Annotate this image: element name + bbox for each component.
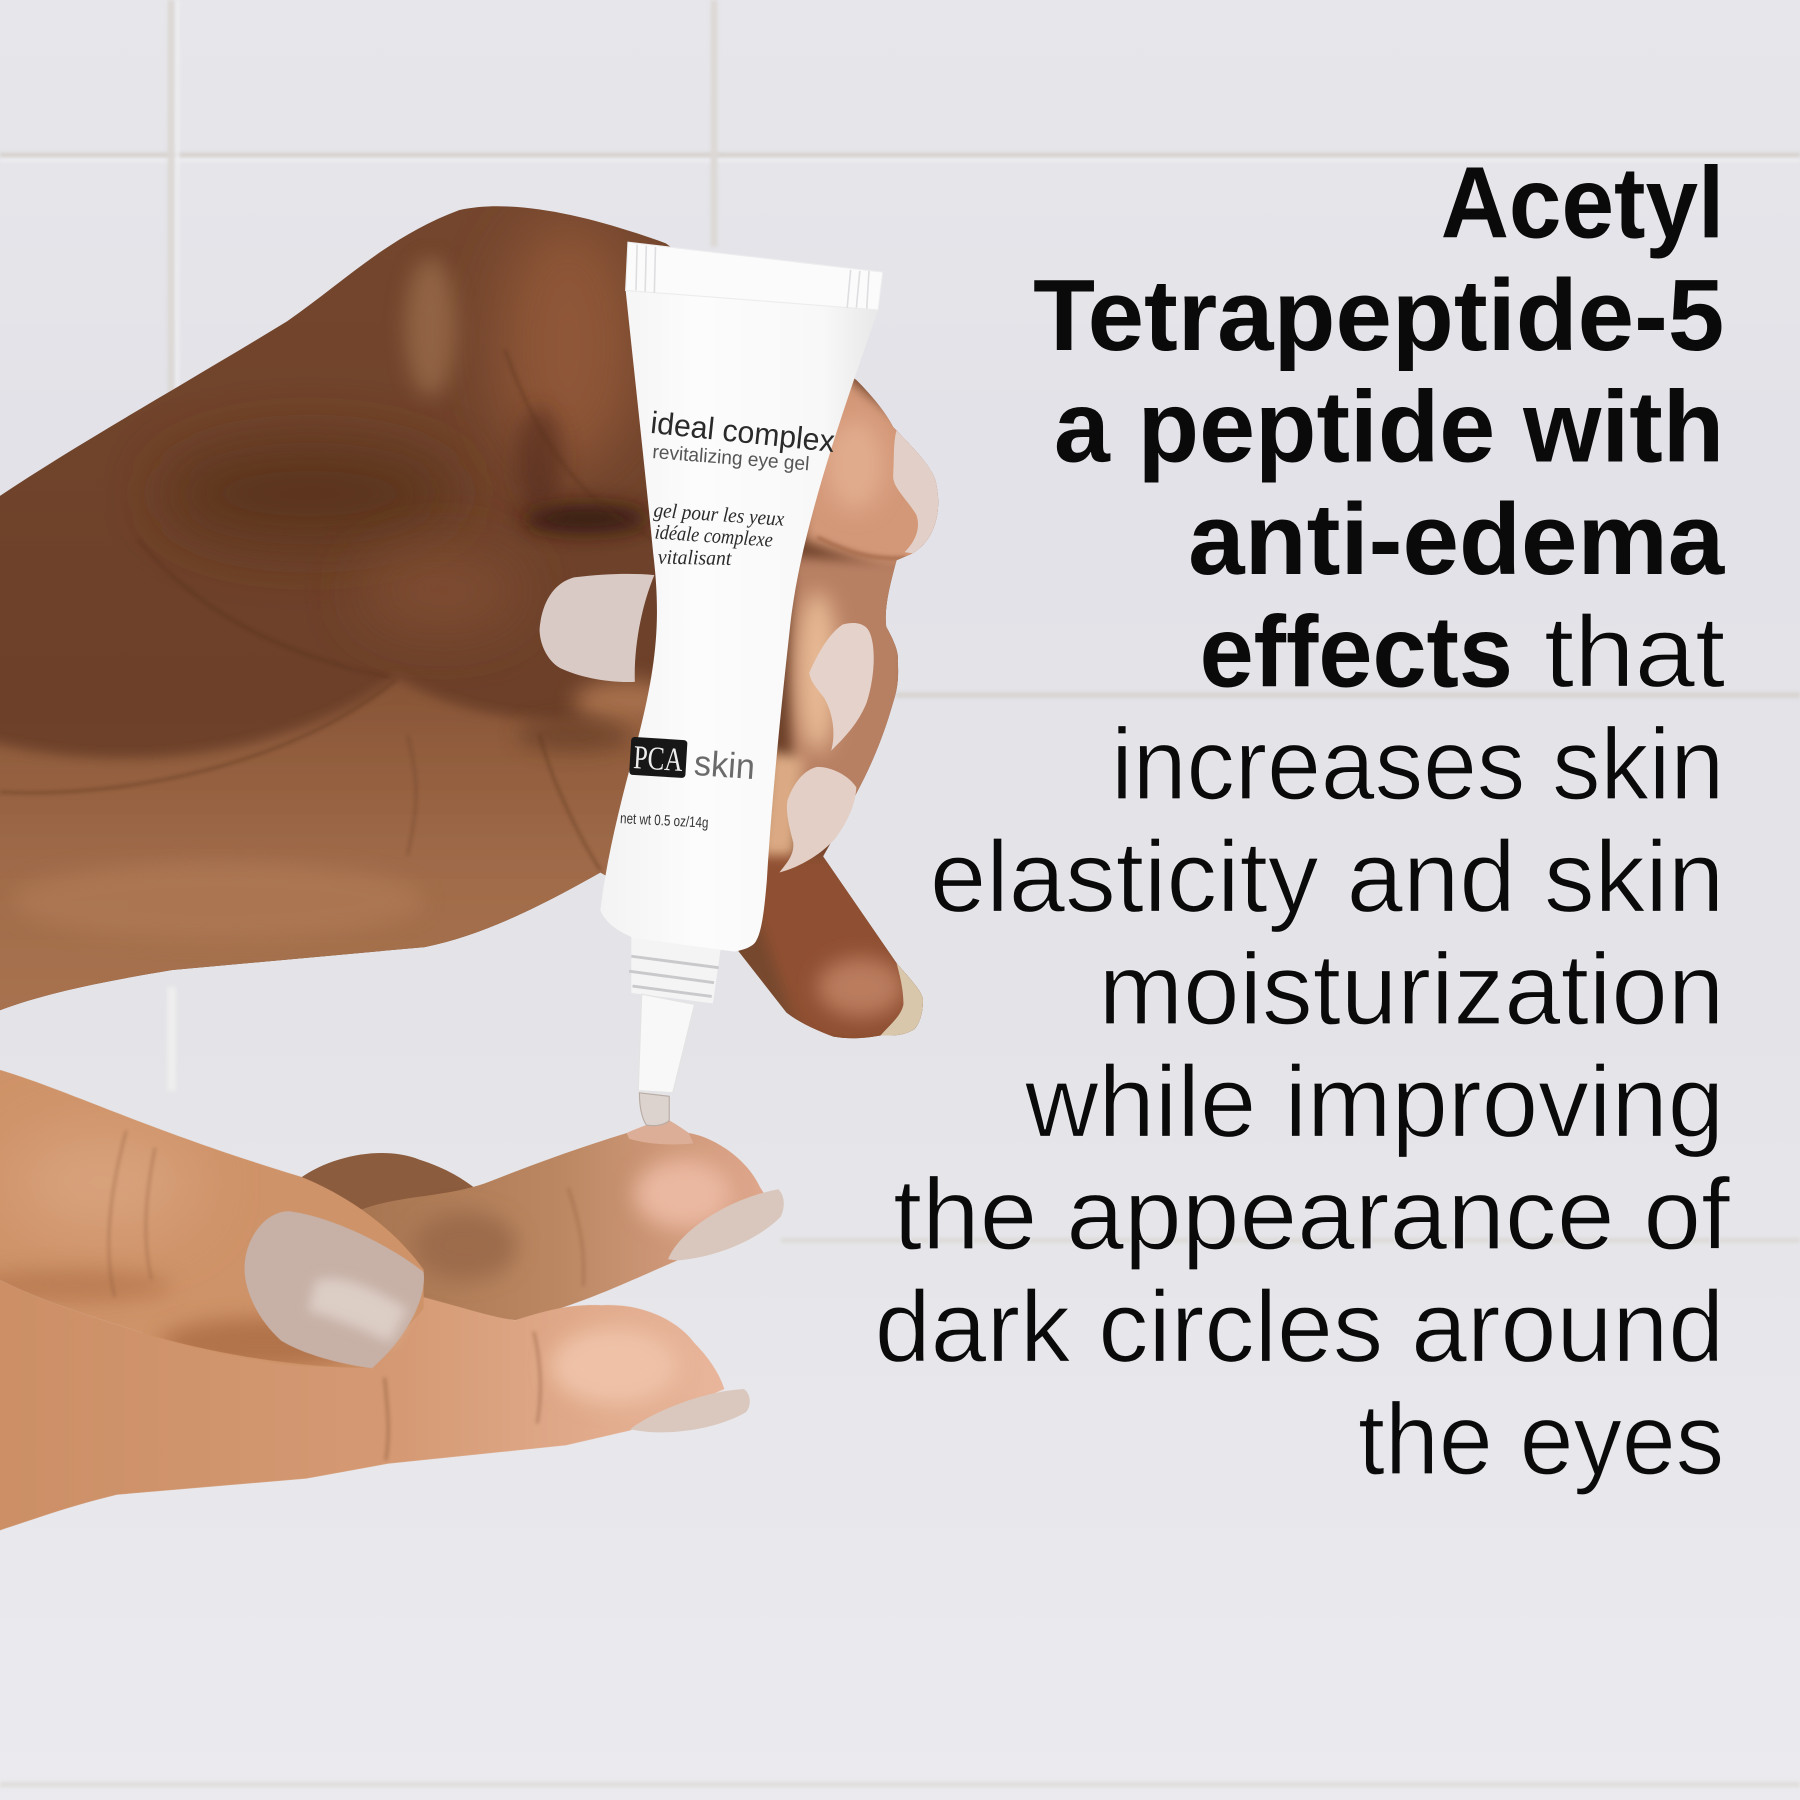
blue sliver between fingers bbox=[530, 1304, 556, 1320]
lower hand with fingertip bbox=[0, 1070, 784, 1530]
regular continuation: that bbox=[1544, 596, 1725, 708]
skin wordmark: skin bbox=[693, 743, 756, 787]
tube label: ideal complex: ideal complex bbox=[649, 405, 837, 459]
nozzle bbox=[638, 994, 695, 1093]
tube label: french line 2: idéale complexe bbox=[654, 521, 773, 552]
regular continuation bbox=[875, 596, 1731, 1496]
regular continuation: the appearance of bbox=[893, 1159, 1731, 1271]
hand shading bbox=[0, 218, 953, 1045]
bold lead-in bbox=[1033, 148, 1725, 708]
middle finger nail bbox=[809, 623, 874, 751]
upper hand holding the tube bbox=[0, 206, 953, 1045]
ring finger nail bbox=[779, 767, 856, 872]
gel drop bbox=[627, 1093, 693, 1144]
bold lead-in: a peptide with bbox=[1054, 371, 1724, 483]
rear knuckle bbox=[301, 1153, 476, 1228]
tube label: revitalizing eye gel: revitalizing eye gel bbox=[652, 441, 810, 475]
upper thumb bbox=[0, 1070, 424, 1368]
regular continuation: elasticity and skin bbox=[930, 821, 1724, 933]
lower finger and back of hand bbox=[0, 1280, 724, 1530]
tube crimp top bbox=[626, 242, 883, 310]
lighter palm below the thumb bbox=[0, 677, 666, 1033]
bold lead-in: Acetyl bbox=[1441, 148, 1724, 260]
regular continuation: the eyes bbox=[1358, 1384, 1724, 1496]
pinky finger nail bbox=[880, 963, 923, 1036]
large thumb nail bbox=[245, 1211, 424, 1368]
hand creases bbox=[0, 350, 654, 870]
index finger nail bbox=[893, 430, 938, 553]
bold lead-in: anti-edema bbox=[1188, 484, 1725, 596]
net weight: net wt 0.5 oz/14g bbox=[620, 810, 709, 832]
thumb nail bbox=[540, 574, 654, 682]
body copy: right-aligned statement bbox=[875, 148, 1731, 1496]
PCA logo box: PCA bbox=[632, 739, 684, 779]
upper fingertip bbox=[344, 1133, 771, 1320]
product tube bbox=[600, 242, 883, 1093]
bold lead-in: Tetrapeptide-5 bbox=[1033, 260, 1724, 372]
right-side fingers bbox=[804, 379, 938, 568]
upper fingertip nail bbox=[668, 1189, 784, 1260]
regular continuation: dark circles around bbox=[875, 1271, 1724, 1383]
regular continuation: while improving bbox=[1024, 1046, 1724, 1158]
tube label: french line 3: vitalisant bbox=[658, 547, 733, 570]
hand base shape bbox=[0, 206, 938, 1038]
tube label: french line 1: gel pour les yeux bbox=[653, 500, 786, 531]
regular continuation: moisturization bbox=[1099, 934, 1724, 1046]
bold lead-in: effects bbox=[1200, 596, 1513, 708]
threaded neck bbox=[629, 936, 721, 1003]
skin creases bbox=[109, 1131, 584, 1460]
regular continuation: increases skin bbox=[1111, 709, 1724, 821]
tube body bbox=[600, 290, 878, 952]
lower fingertip nail bbox=[630, 1389, 750, 1432]
